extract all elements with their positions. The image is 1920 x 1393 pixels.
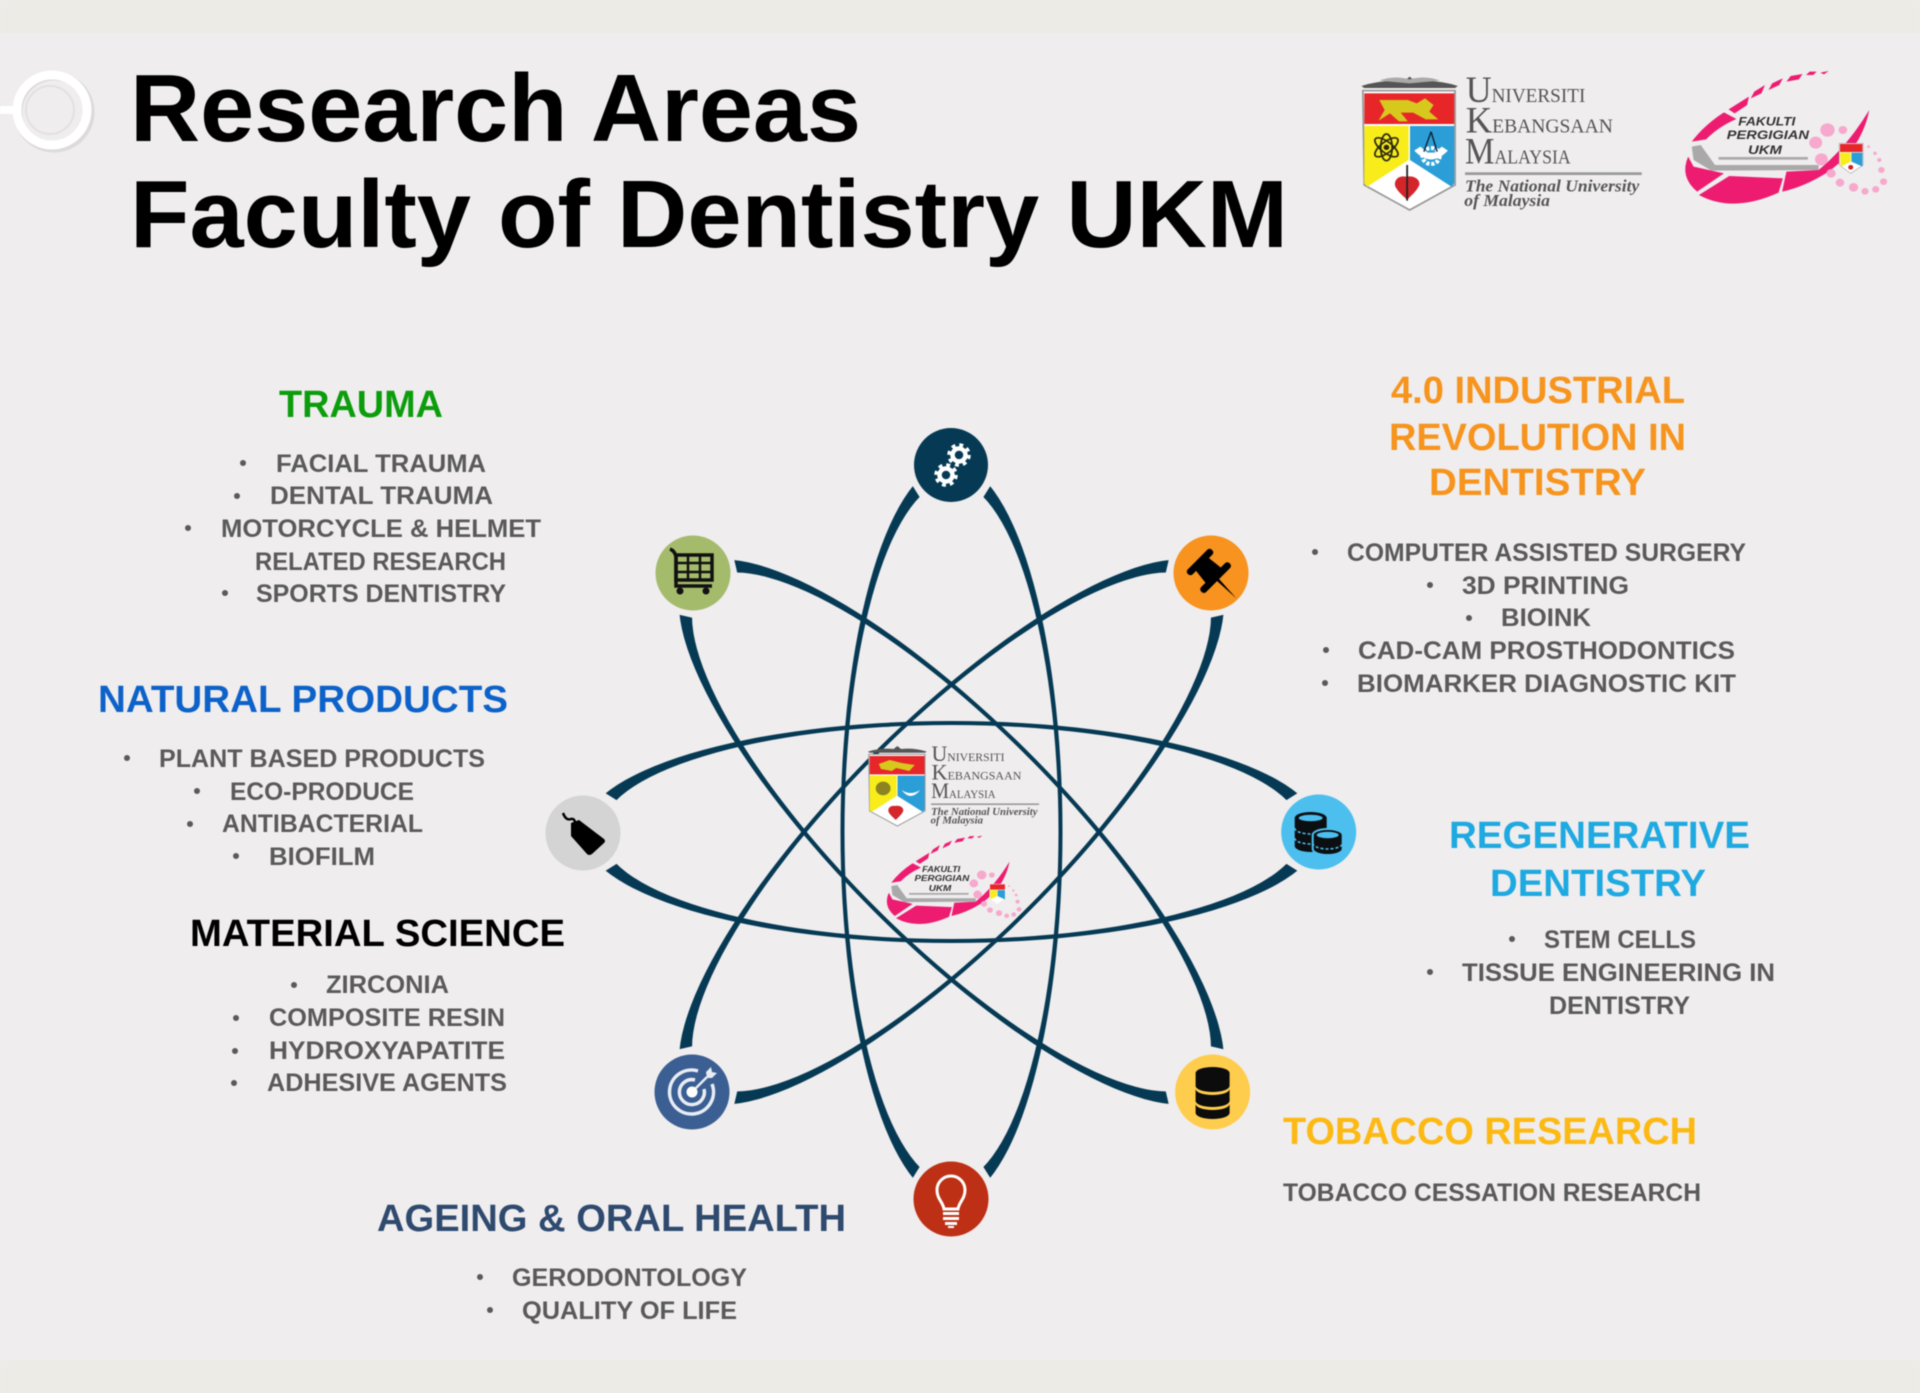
center mini crest <box>990 884 1005 904</box>
section: 4.0 Industrial Revolution <box>1312 370 1746 698</box>
list: Regenerative topics: TISSUE ENGINEERING IN <box>1462 959 1775 987</box>
heading: Tobacco Research: TOBACCO RESEARCH <box>1283 1111 1697 1153</box>
center chair <box>891 885 976 902</box>
heading: 4.0 Industrial Revolution in Dentistry: DENTISTRY <box>1429 462 1646 504</box>
icon: gears <box>914 428 988 502</box>
list: Regenerative topics: STEM CELLS <box>1544 926 1696 954</box>
list: Ageing topics: QUALITY OF LIFE <box>522 1297 737 1325</box>
faculty name <box>1727 115 1810 157</box>
icon: shopping cart <box>656 536 730 610</box>
list: Industrial Revolution topics <box>1312 539 1746 698</box>
list: Material Science topics: ADHESIVE AGENTS <box>267 1069 507 1097</box>
list: Natural Products topics: ECO-PRODUCE <box>230 778 414 806</box>
heading: Ageing and Oral Health: AGEING & ORAL HEALTH <box>377 1198 846 1240</box>
icon: database <box>1175 1054 1250 1130</box>
heading: Trauma: TRAUMA <box>279 384 443 426</box>
section: Tobacco Research <box>1283 1111 1701 1207</box>
heading: Material Science: MATERIAL SCIENCE <box>190 913 565 955</box>
list: Trauma topics: FACIAL TRAUMA <box>276 450 486 478</box>
section: Trauma <box>185 384 541 608</box>
mini crest <box>1839 143 1863 173</box>
heading: 4.0 Industrial Revolution in Dentistry <box>1389 370 1686 504</box>
center wordmark: of Malaysia <box>931 816 983 826</box>
list: Material Science topics: COMPOSITE RESIN <box>269 1004 505 1032</box>
list: Material Science topics <box>231 971 507 1097</box>
list: Industrial Revolution topics: CAD-CAM PROSTHODONTICS <box>1358 637 1735 665</box>
heading: Regenerative Dentistry <box>1449 815 1750 905</box>
center logo: Universiti Kebangsaan Malaysia <box>868 742 1039 826</box>
icon: coins <box>1281 794 1356 870</box>
icon: title ring marker <box>0 75 90 148</box>
crest <box>1361 77 1458 210</box>
title: Faculty of Dentistry UKM <box>130 161 1288 268</box>
center wordmark: KEBANGSAAN <box>932 760 1021 785</box>
icon: target <box>654 1054 730 1130</box>
orbit: diagonal descending <box>585 466 1318 1198</box>
list: Trauma topics: RELATED RESEARCH <box>255 548 506 576</box>
faculty name: UKM <box>1748 143 1783 157</box>
section: Regenerative Dentistry <box>1427 815 1775 1020</box>
center wordmark: The National University <box>931 807 1038 818</box>
center faculty name: UKM <box>929 884 953 893</box>
center faculty name: PERGIGIAN <box>915 874 971 883</box>
heading: 4.0 Industrial Revolution in Dentistry: REVOLUTION IN <box>1389 417 1686 459</box>
diagram: atom orbits <box>544 425 1358 1239</box>
list: Regenerative topics <box>1427 926 1775 1020</box>
list: Regenerative topics: DENTISTRY <box>1549 992 1690 1020</box>
center faculty name: FAKULTI <box>922 865 961 874</box>
dots <box>1809 123 1887 195</box>
center wordmark: UNIVERSITI <box>932 742 1005 767</box>
heading: Regenerative Dentistry: REGENERATIVE <box>1449 815 1750 857</box>
text: Tobacco topic: TOBACCO CESSATION RESEARCH <box>1283 1179 1701 1207</box>
section: Material Science <box>190 913 565 1097</box>
list: Trauma topics: MOTORCYCLE & HELMET <box>221 515 541 543</box>
pink swoosh <box>1685 71 1869 204</box>
faculty name: PERGIGIAN <box>1727 128 1810 142</box>
university wordmark: The National University <box>1465 177 1640 195</box>
heading: Natural Products: NATURAL PRODUCTS <box>98 679 508 721</box>
center dots <box>970 871 1021 918</box>
university wordmark: UNIVERSITI <box>1466 70 1585 111</box>
list: Industrial Revolution topics: BIOMARKER DIAGNOSTIC KIT <box>1357 670 1736 698</box>
title <box>130 55 1288 268</box>
heading: Regenerative Dentistry: DENTISTRY <box>1490 863 1706 905</box>
orbit: diagonal ascending <box>585 466 1318 1198</box>
university wordmark: KEBANGSAAN <box>1466 101 1613 141</box>
university wordmark: MALAYSIA <box>1465 131 1571 172</box>
list: Ageing topics: GERODONTOLOGY <box>512 1264 747 1292</box>
list: Ageing topics <box>477 1264 747 1325</box>
university wordmark: of Malaysia <box>1464 192 1550 210</box>
center swoosh <box>887 836 1010 924</box>
section: Natural Products <box>98 679 508 871</box>
list: Trauma topics: SPORTS DENTISTRY <box>256 580 506 608</box>
list: Industrial Revolution topics: 3D PRINTING <box>1462 572 1629 600</box>
icon: light bulb <box>914 1162 988 1236</box>
university wordmark <box>1464 70 1642 210</box>
heading: 4.0 Industrial Revolution in Dentistry: 4.0 INDUSTRIAL <box>1391 370 1685 412</box>
icon: price tag <box>546 796 620 870</box>
center crest <box>868 746 927 826</box>
logo: Universiti Kebangsaan Malaysia <box>1361 70 1642 210</box>
list: Material Science topics: ZIRCONIA <box>326 971 449 999</box>
list: Trauma topics <box>185 450 541 608</box>
dental chair <box>1692 145 1819 171</box>
center logo: Fakulti Pergigian UKM <box>887 836 1021 924</box>
list: Trauma topics: DENTAL TRAUMA <box>270 482 493 510</box>
orbit: vertical <box>840 425 1062 1239</box>
list: Industrial Revolution topics: COMPUTER ASSISTED SURGERY <box>1347 539 1746 567</box>
list: Natural Products topics: PLANT BASED PRODUCTS <box>159 745 485 773</box>
title: Research Areas <box>130 55 861 162</box>
center wordmark: MALAYSIA <box>931 779 996 804</box>
center wordmark <box>931 742 1039 826</box>
logo: Fakulti Pergigian UKM <box>1685 71 1887 204</box>
list: Natural Products topics <box>124 745 485 871</box>
section: Ageing and Oral Health <box>377 1198 846 1325</box>
faculty name: FAKULTI <box>1738 115 1796 128</box>
list: Natural Products topics: ANTIBACTERIAL <box>222 810 423 838</box>
list: Natural Products topics: BIOFILM <box>269 843 375 871</box>
orbit: horizontal <box>544 721 1358 943</box>
list: Material Science topics: HYDROXYAPATITE <box>269 1037 505 1065</box>
center faculty name <box>915 865 971 893</box>
list: Industrial Revolution topics: BIOINK <box>1501 604 1591 632</box>
icon: push pin <box>1174 536 1251 613</box>
